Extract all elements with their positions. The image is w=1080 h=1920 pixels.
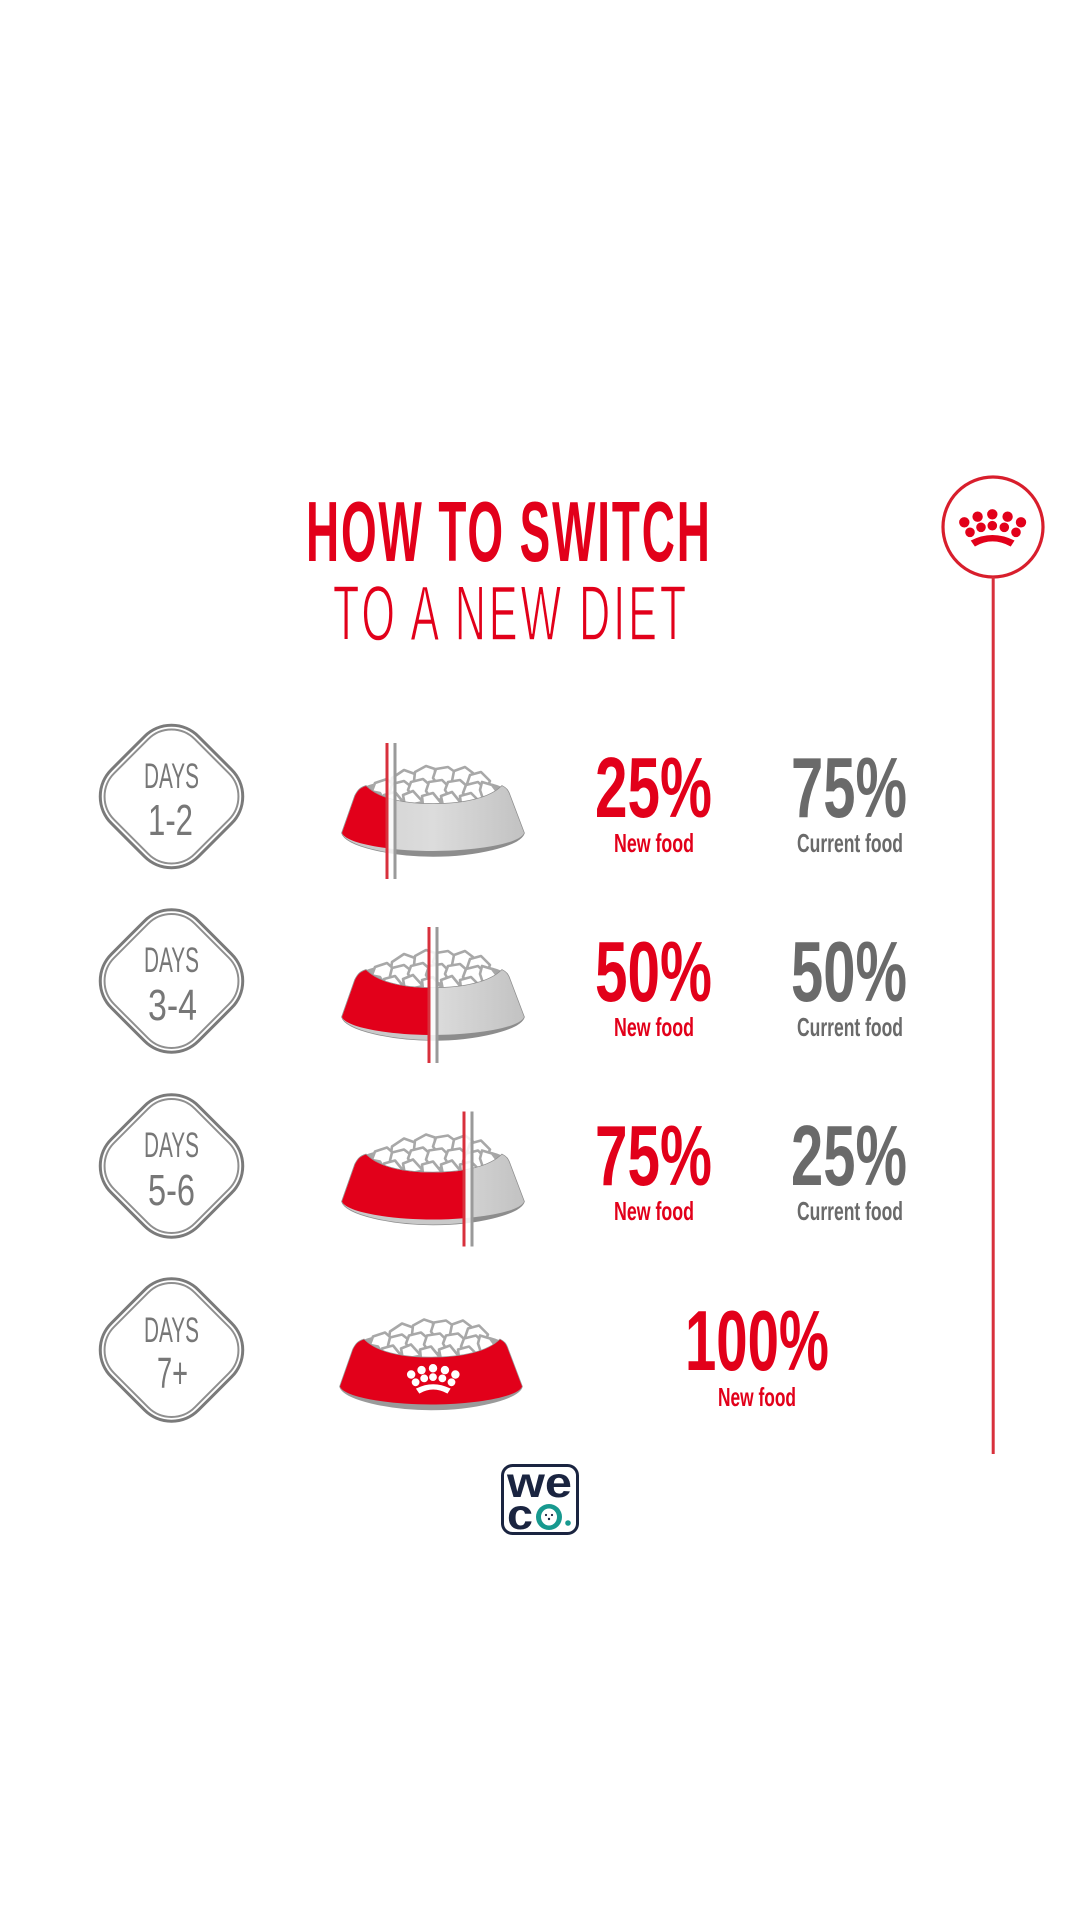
badge: days 7+: DAYS <box>144 1311 199 1350</box>
title <box>306 485 710 657</box>
icon: dog face in teal circle <box>536 1504 562 1530</box>
stat: 100 percent new food: New food <box>718 1382 796 1412</box>
badge: days 1-2: 1-2 <box>148 796 193 845</box>
stat: 25 percent current food: Current food <box>797 1196 903 1226</box>
stat: 75 percent current food: Current food <box>797 828 903 858</box>
stat: 25 percent new food: 25% <box>595 741 712 836</box>
row: days 1-2 <box>98 724 906 879</box>
stat: 75 percent new food: 75% <box>595 1109 712 1204</box>
stat: 50 percent new food <box>595 925 712 1042</box>
stat: 50 percent new food: 50% <box>595 925 712 1020</box>
stat: 100 percent new food: 100% <box>685 1294 829 1389</box>
stat: 25 percent current food: 25% <box>791 1109 907 1204</box>
stat: 75 percent new food <box>595 1109 712 1226</box>
infographic canvas <box>98 475 1045 1535</box>
icon: bowl 50 percent <box>342 927 524 1063</box>
stat: 50 percent current food <box>791 925 907 1042</box>
stat: 25 percent new food: New food <box>614 828 694 858</box>
stat: 50 percent current food: 50% <box>791 925 907 1020</box>
badge: days 3-4: 3-4 <box>148 981 197 1030</box>
stat: 75 percent new food: New food <box>614 1196 694 1226</box>
badge: days 3-4 <box>85 894 258 1068</box>
badge: days 1-2 <box>85 710 258 883</box>
icon: brand crown badge with timeline line <box>943 477 1043 1454</box>
badge: days 3-4: DAYS <box>144 941 199 980</box>
stat: 75 percent current food <box>791 741 907 858</box>
stat: 25 percent new food <box>595 741 712 858</box>
badge: days 5-6 <box>85 1079 258 1253</box>
stat: 100 percent new food <box>685 1294 829 1412</box>
badge: days 1-2: DAYS <box>144 757 199 796</box>
title: TO A NEW DIET <box>333 571 686 657</box>
logo: weco <box>502 1459 578 1539</box>
icon: bowl 25 percent <box>342 743 524 879</box>
logo: weco: c <box>507 1491 533 1539</box>
badge: days 5-6: DAYS <box>144 1126 199 1165</box>
stat: 25 percent current food <box>791 1109 907 1226</box>
row: days 5-6 <box>98 1093 906 1246</box>
icon: bowl 75 percent <box>342 1112 524 1246</box>
badge: days 7+: 7+ <box>157 1349 188 1398</box>
title: HOW TO SWITCH <box>306 485 710 580</box>
badge: days 7+ <box>85 1263 258 1437</box>
logo: weco: we <box>506 1459 572 1507</box>
row: days 3-4 <box>98 908 906 1063</box>
stat: 50 percent current food: Current food <box>797 1012 903 1042</box>
stat: 50 percent new food: New food <box>614 1012 694 1042</box>
icon: full red bowl with crown <box>340 1320 522 1410</box>
stat: 75 percent current food: 75% <box>791 741 907 836</box>
badge: days 5-6: 5-6 <box>148 1166 195 1215</box>
row: days 7+ <box>85 1263 829 1437</box>
